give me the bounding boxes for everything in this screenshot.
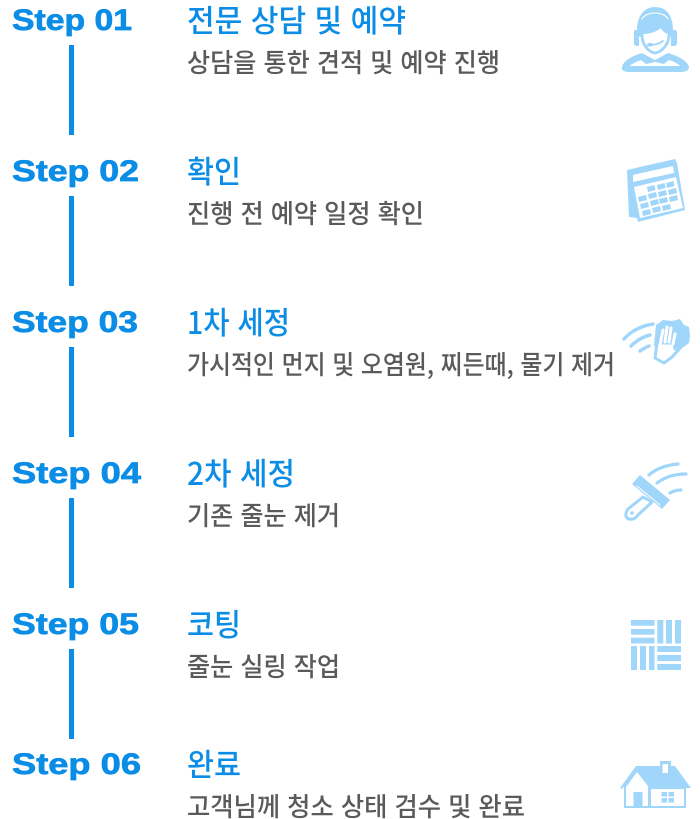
step 04 <box>12 449 686 588</box>
step 06 <box>12 740 691 819</box>
step 04 label: Step 04 <box>12 457 141 490</box>
step 03 <box>12 298 690 437</box>
step 04 connector line <box>69 498 74 588</box>
step 02 connector line <box>69 196 74 286</box>
step 06 label: Step 06 <box>12 748 141 781</box>
icon: squeegee <box>626 464 686 519</box>
step 03 connector line <box>69 347 74 437</box>
step 01 connector line <box>69 45 74 135</box>
step 03 description: 가시적인 먼지 및 오염원, 찌든때, 물기 제거 <box>187 345 615 382</box>
step 02 label: Step 02 <box>12 155 139 188</box>
step 05 title: 코팅 <box>187 600 241 645</box>
step 02 description: 진행 전 예약 일정 확인 <box>187 194 424 231</box>
step 02 <box>12 147 685 286</box>
step 03 title: 1차 세정 <box>187 298 290 343</box>
step 01 <box>12 0 689 135</box>
step 02 title: 확인 <box>187 147 241 192</box>
step 04 description: 기존 줄눈 제거 <box>187 496 340 533</box>
step 06 title: 완료 <box>187 740 241 785</box>
icon: headset agent <box>622 7 689 72</box>
icon: tile grout pattern <box>631 620 681 670</box>
icon: calendar <box>627 159 685 222</box>
step 05 label: Step 05 <box>12 608 139 641</box>
step 05 description: 줄눈 실링 작업 <box>187 647 340 684</box>
step 01 label: Step 01 <box>12 4 132 37</box>
step 01 description: 상담을 통한 견적 및 예약 진행 <box>187 43 500 80</box>
step 03 label: Step 03 <box>12 306 138 339</box>
icon: house <box>620 761 691 808</box>
step 05 connector line <box>69 649 74 739</box>
icon: wiping hand <box>624 319 690 363</box>
step 05 <box>12 600 681 739</box>
step 04 title: 2차 세정 <box>187 449 295 494</box>
